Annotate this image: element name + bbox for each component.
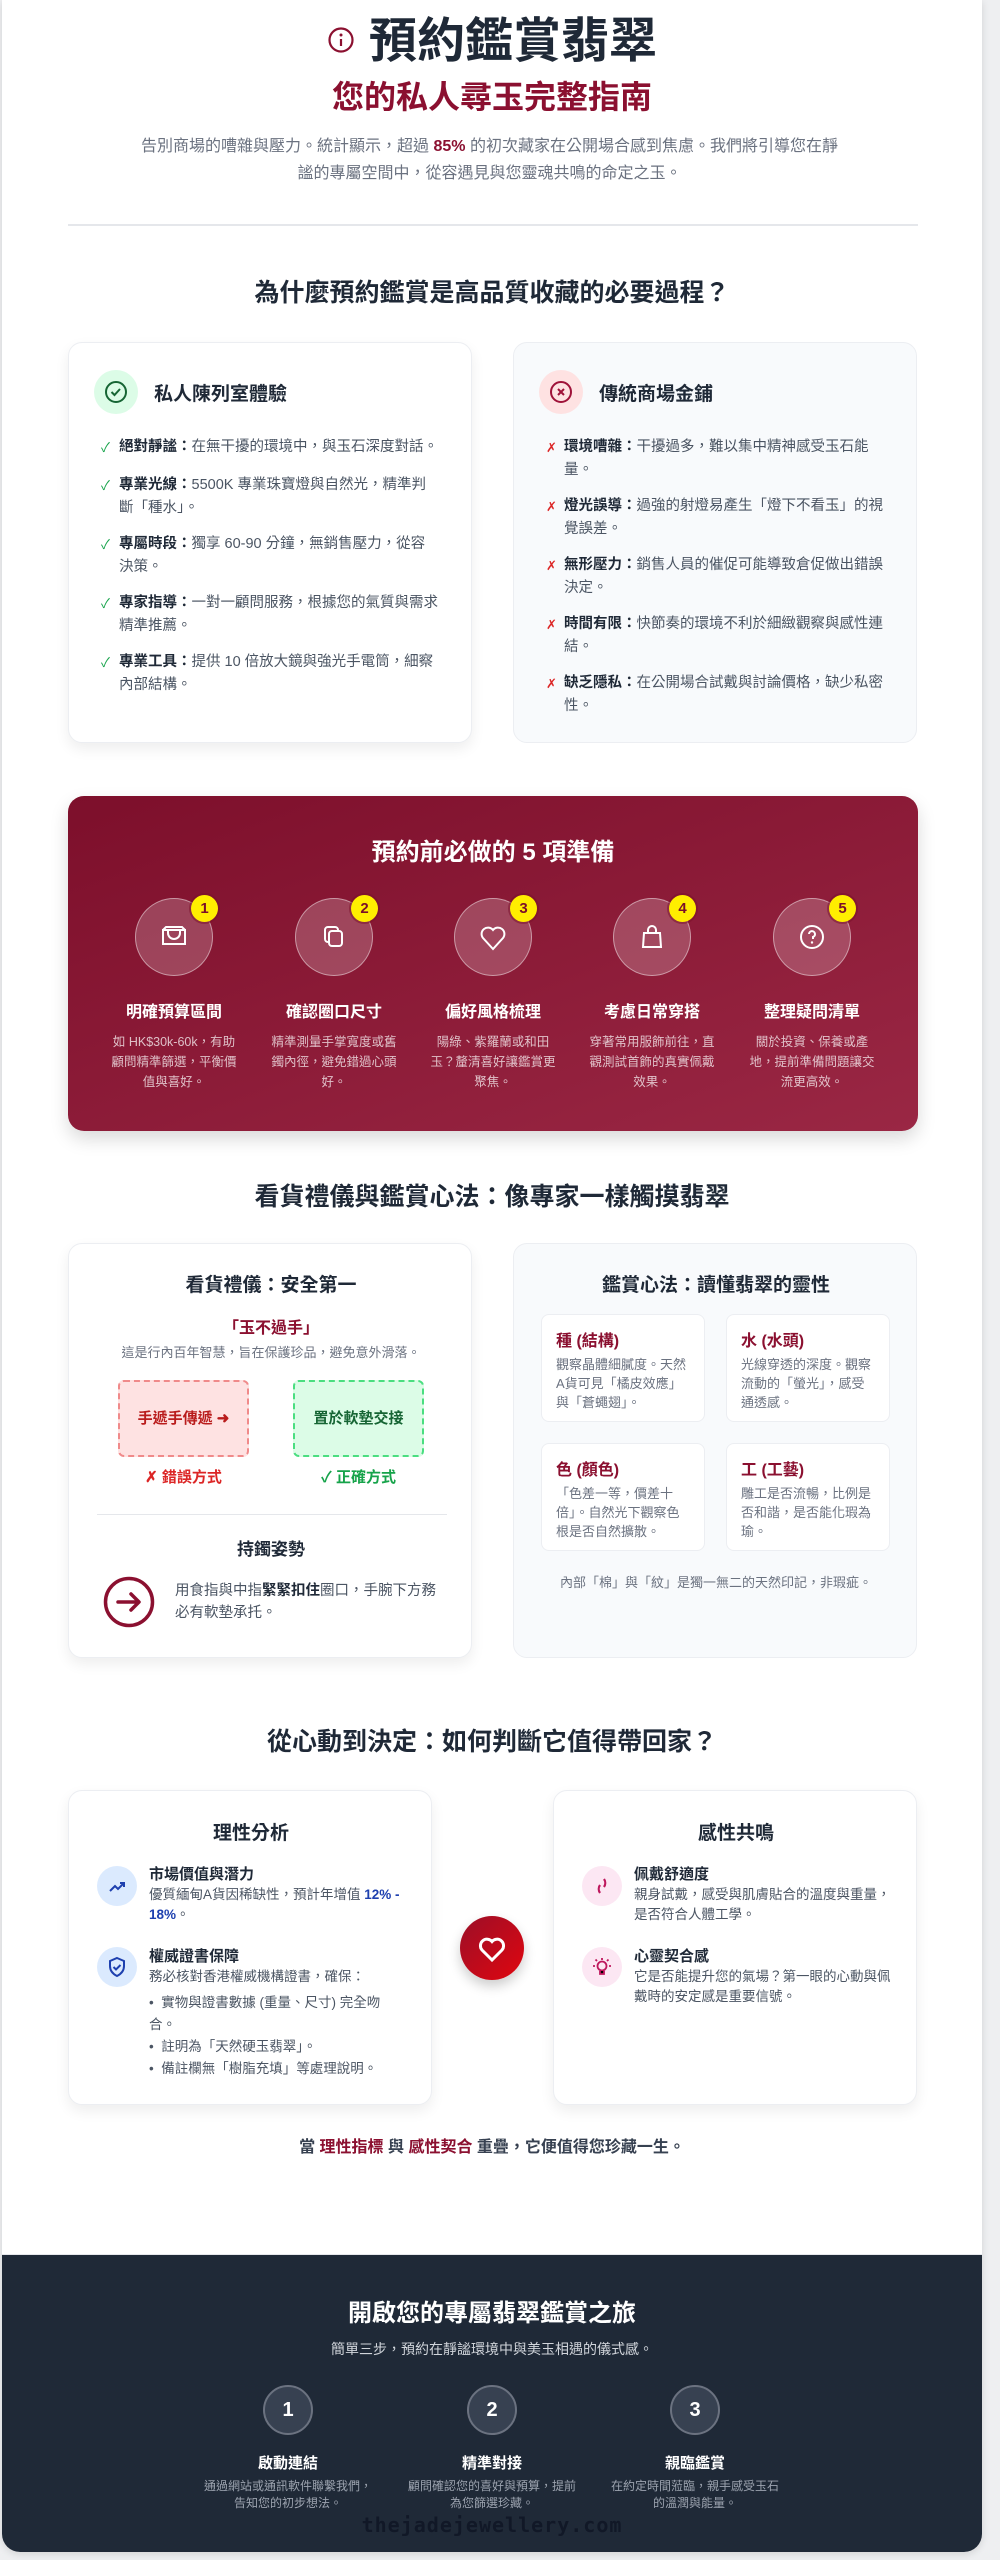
icon: bulb	[582, 1947, 622, 1987]
step 4: 4	[678, 900, 687, 917]
panel: rational: 優質緬甸A貨因稀缺性，預計年增值 12% - 18%。	[149, 1887, 400, 1922]
list: 無形壓力：銷售人員的催促可能導致倉促做出錯誤決定。	[564, 557, 883, 596]
step 5: 關於投資、保養或產地，提前準備問題讓交流更高效。	[749, 1035, 874, 1089]
card: craft: 雕工是否流暢，比例是否和諧，是否能化瑕為瑜。	[741, 1486, 871, 1539]
icon: refresh	[582, 1866, 622, 1906]
list: 專業光線：5500K 專業珠寶燈與自然光，精準判斷「種水」。	[119, 477, 426, 516]
title: 預約鑑賞翡翠	[369, 15, 657, 68]
heading: 預約前必做的 5 項準備	[372, 839, 614, 866]
icon: trend	[97, 1866, 137, 1906]
subtitle: 您的私人尋玉完整指南	[332, 79, 652, 115]
panel: private showroom: ✓	[101, 478, 110, 493]
panel: appreciation	[513, 1243, 917, 1658]
step 2: 2	[360, 900, 369, 917]
right way box: 置於軟墊交接	[313, 1410, 404, 1427]
panel: etiquette: 看貨禮儀：安全第一	[185, 1275, 356, 1296]
step 3	[430, 895, 556, 1089]
card: water	[726, 1314, 890, 1422]
step 2: 精準測量手掌寬度或舊鐲內徑，避免錯過心頭好。	[271, 1035, 396, 1089]
list	[546, 438, 883, 714]
icon: shield	[97, 1947, 137, 1987]
step 2: 確認圈口尺寸	[286, 1004, 382, 1021]
step 3: 陽綠、紫羅蘭或和田玉？釐清喜好讓鑑賞更聚焦。	[430, 1035, 556, 1089]
icon: heart center	[460, 1916, 524, 1980]
step 2	[271, 895, 396, 1089]
panel: emotional: 心靈契合感	[634, 1948, 709, 1965]
list: 缺乏隱私：在公開場合試戴與討論價格，缺少私密性。	[564, 675, 883, 714]
panel: rational: 權威證書保障	[149, 1948, 239, 1965]
step 1: 如 HK$30k-60k，有助顧問精準篩選，平衡價值與喜好。	[111, 1035, 236, 1089]
card: craft: 工 (工藝)	[741, 1462, 804, 1479]
panel: rational: • 註明為「天然硬玉翡翠」。	[149, 2039, 316, 2054]
step 3: 在約定時間蒞臨，親手感受玉石的溫潤與能量。	[611, 2479, 779, 2510]
panel: private showroom: ✓	[101, 655, 110, 670]
step 3: 親臨鑑賞	[665, 2455, 725, 2472]
step 1: 通過網站或通訊軟件聯繫我們，告知您的初步想法。	[204, 2479, 372, 2510]
panel: emotional: 親身試戴，感受與肌膚貼合的溫度與重量，是否符合人體工學。	[634, 1887, 890, 1922]
watermark: thejadejewellery.com	[362, 2513, 622, 2537]
right way box: ✓ 正確方式	[321, 1469, 396, 1486]
step 1: 啟動連結	[258, 2455, 318, 2472]
panel: traditional mall	[513, 342, 917, 743]
panel: appreciation: 內部「棉」與「紋」是獨一無二的天然印記，非瑕疵。	[560, 1575, 872, 1590]
panel: rational: • 實物與證書數據 (重量、尺寸) 完全吻合。	[149, 1995, 380, 2032]
panel: emotional: 它是否能提升您的氣場？第一眼的心動與佩戴時的安定感是重要信號。	[634, 1969, 890, 2004]
heading: decision: 從心動到決定：如何判斷它值得帶回家？	[267, 1728, 717, 1756]
panel: rational	[68, 1790, 432, 2105]
step 4	[589, 893, 714, 1089]
panel: traditional mall: ✗	[546, 558, 557, 573]
step 2: 2	[486, 2399, 498, 2421]
panel: etiquette: 持鐲姿勢	[237, 1540, 305, 1559]
wrong way box: ✗ 錯誤方式	[145, 1469, 222, 1486]
panel: emotional	[553, 1790, 917, 2105]
step 2: 精準對接	[462, 2455, 522, 2472]
icon: arrow circle	[104, 1576, 154, 1628]
heading: etiquette: 看貨禮儀與鑑賞心法：像專家一樣觸摸翡翠	[254, 1183, 730, 1211]
step 1: 1	[282, 2399, 294, 2421]
step 5	[749, 893, 874, 1089]
list: 燈光誤導：過強的射燈易產生「燈下不看玉」的視覺誤差。	[564, 498, 883, 537]
icon: info	[328, 27, 354, 53]
callout: jade not hand to hand: 「玉不過手」	[223, 1320, 319, 1337]
wrong way box	[118, 1380, 249, 1486]
step 3: 3	[689, 2399, 701, 2421]
panel: rational: 市場價值與潛力	[149, 1866, 254, 1883]
panel: traditional mall: ✗	[546, 676, 557, 691]
card: color	[541, 1443, 705, 1551]
panel: traditional mall: ✗	[546, 617, 557, 632]
panel: 5 preparations	[68, 796, 918, 1131]
list: 專業工具：提供 10 倍放大鏡與強光手電筒，細察內部結構。	[119, 654, 433, 693]
panel: traditional mall: ✗	[546, 440, 557, 455]
wrong way box: 手遞手傳遞 ➜	[138, 1410, 229, 1427]
step 2: 顧問確認您的喜好與預算，提前為您篩選珍藏。	[408, 2479, 576, 2510]
list: 絕對靜謐：在無干擾的環境中，與玉石深度對話。	[119, 439, 438, 455]
list	[101, 438, 438, 693]
step 1: 1	[200, 900, 209, 917]
panel: private showroom	[68, 342, 472, 743]
panel: appreciation: 鑑賞心法：讀懂翡翠的靈性	[602, 1275, 830, 1296]
heading: 傳統商場金鋪	[599, 384, 713, 405]
panel: footer CTA: 簡單三步，預約在靜謐環境中與美玉相遇的儀式感。	[331, 2341, 653, 2357]
intro text: 告別商場的嘈雜與壓力。統計顯示，超過 85% 的初次藏家在公開場合感到焦慮。我們將引導您在靜謐的專屬空間中，從容遇見與您靈魂共鳴的命定之玉。	[141, 138, 838, 182]
step 2	[408, 2385, 576, 2510]
step 1	[111, 895, 236, 1089]
panel: rational: 務必核對香港權威機構證書，確保：	[149, 1969, 365, 1984]
card: texture: 觀察晶體細膩度。天然A貨可見「橘皮效應」與「蒼蠅翅」。	[556, 1357, 686, 1410]
panel: emotional: 佩戴舒適度	[634, 1866, 709, 1883]
card: texture	[541, 1314, 705, 1422]
step 5: 5	[838, 900, 847, 917]
step 1: 明確預算區間	[126, 1004, 222, 1021]
panel: etiquette: 用食指與中指緊緊扣住圈口，手腕下方務必有軟墊承托。	[175, 1583, 436, 1621]
heading: 私人陳列室體驗	[154, 384, 287, 405]
list: 時間有限：快節奏的環境不利於細緻觀察與感性連結。	[564, 616, 883, 655]
card: water: 水 (水頭)	[741, 1333, 804, 1350]
panel: etiquette	[68, 1243, 472, 1658]
step 3: 3	[519, 900, 528, 917]
step 5: 整理疑問清單	[764, 1004, 860, 1021]
icon: check	[94, 370, 138, 414]
panel: emotional: 感性共鳴	[698, 1823, 774, 1844]
panel: rational: 理性分析	[213, 1823, 289, 1844]
card: texture: 種 (結構)	[556, 1333, 619, 1350]
card: water: 光線穿透的深度。觀察流動的「螢光」，感受通透感。	[741, 1357, 871, 1410]
icon: cross	[539, 370, 583, 414]
step 3: 偏好風格梳理	[445, 1004, 541, 1021]
card: craft	[726, 1443, 890, 1551]
conclusion note: 當 理性指標 與 感性契合 重疊，它便值得您珍藏一生。	[299, 2139, 685, 2156]
list: 專屬時段：獨享 60-90 分鐘，無銷售壓力，從容決策。	[119, 536, 425, 575]
list: 專家指導：一對一顧問服務，根據您的氣質與需求精準推薦。	[119, 595, 438, 634]
panel: traditional mall: ✗	[546, 499, 557, 514]
card: color: 色 (顏色)	[556, 1462, 619, 1479]
heading: why: 為什麼預約鑑賞是高品質收藏的必要過程？	[254, 279, 730, 307]
panel: private showroom: ✓	[101, 537, 110, 552]
right way box	[293, 1380, 424, 1486]
step 1	[204, 2385, 372, 2510]
card: color: 「色差一等，價差十倍」。自然光下觀察色根是否自然擴散。	[556, 1486, 680, 1539]
panel: private showroom: ✓	[101, 596, 110, 611]
panel: etiquette: 這是行內百年智慧，旨在保護珍品，避免意外滑落。	[121, 1345, 420, 1360]
panel: footer CTA: 開啟您的專屬翡翠鑑賞之旅	[348, 2300, 636, 2327]
list: 環境嘈雜：干擾過多，難以集中精神感受玉石能量。	[564, 439, 868, 478]
step 3	[611, 2385, 779, 2510]
panel: footer CTA	[2, 2254, 982, 2552]
step 4: 穿著常用服飾前往，直觀測試首飾的真實佩戴效果。	[589, 1035, 714, 1089]
panel: rational: • 備註欄無「樹脂充填」等處理說明。	[149, 2061, 377, 2076]
step 4: 考慮日常穿搭	[604, 1004, 700, 1021]
panel: private showroom: ✓	[101, 440, 110, 455]
